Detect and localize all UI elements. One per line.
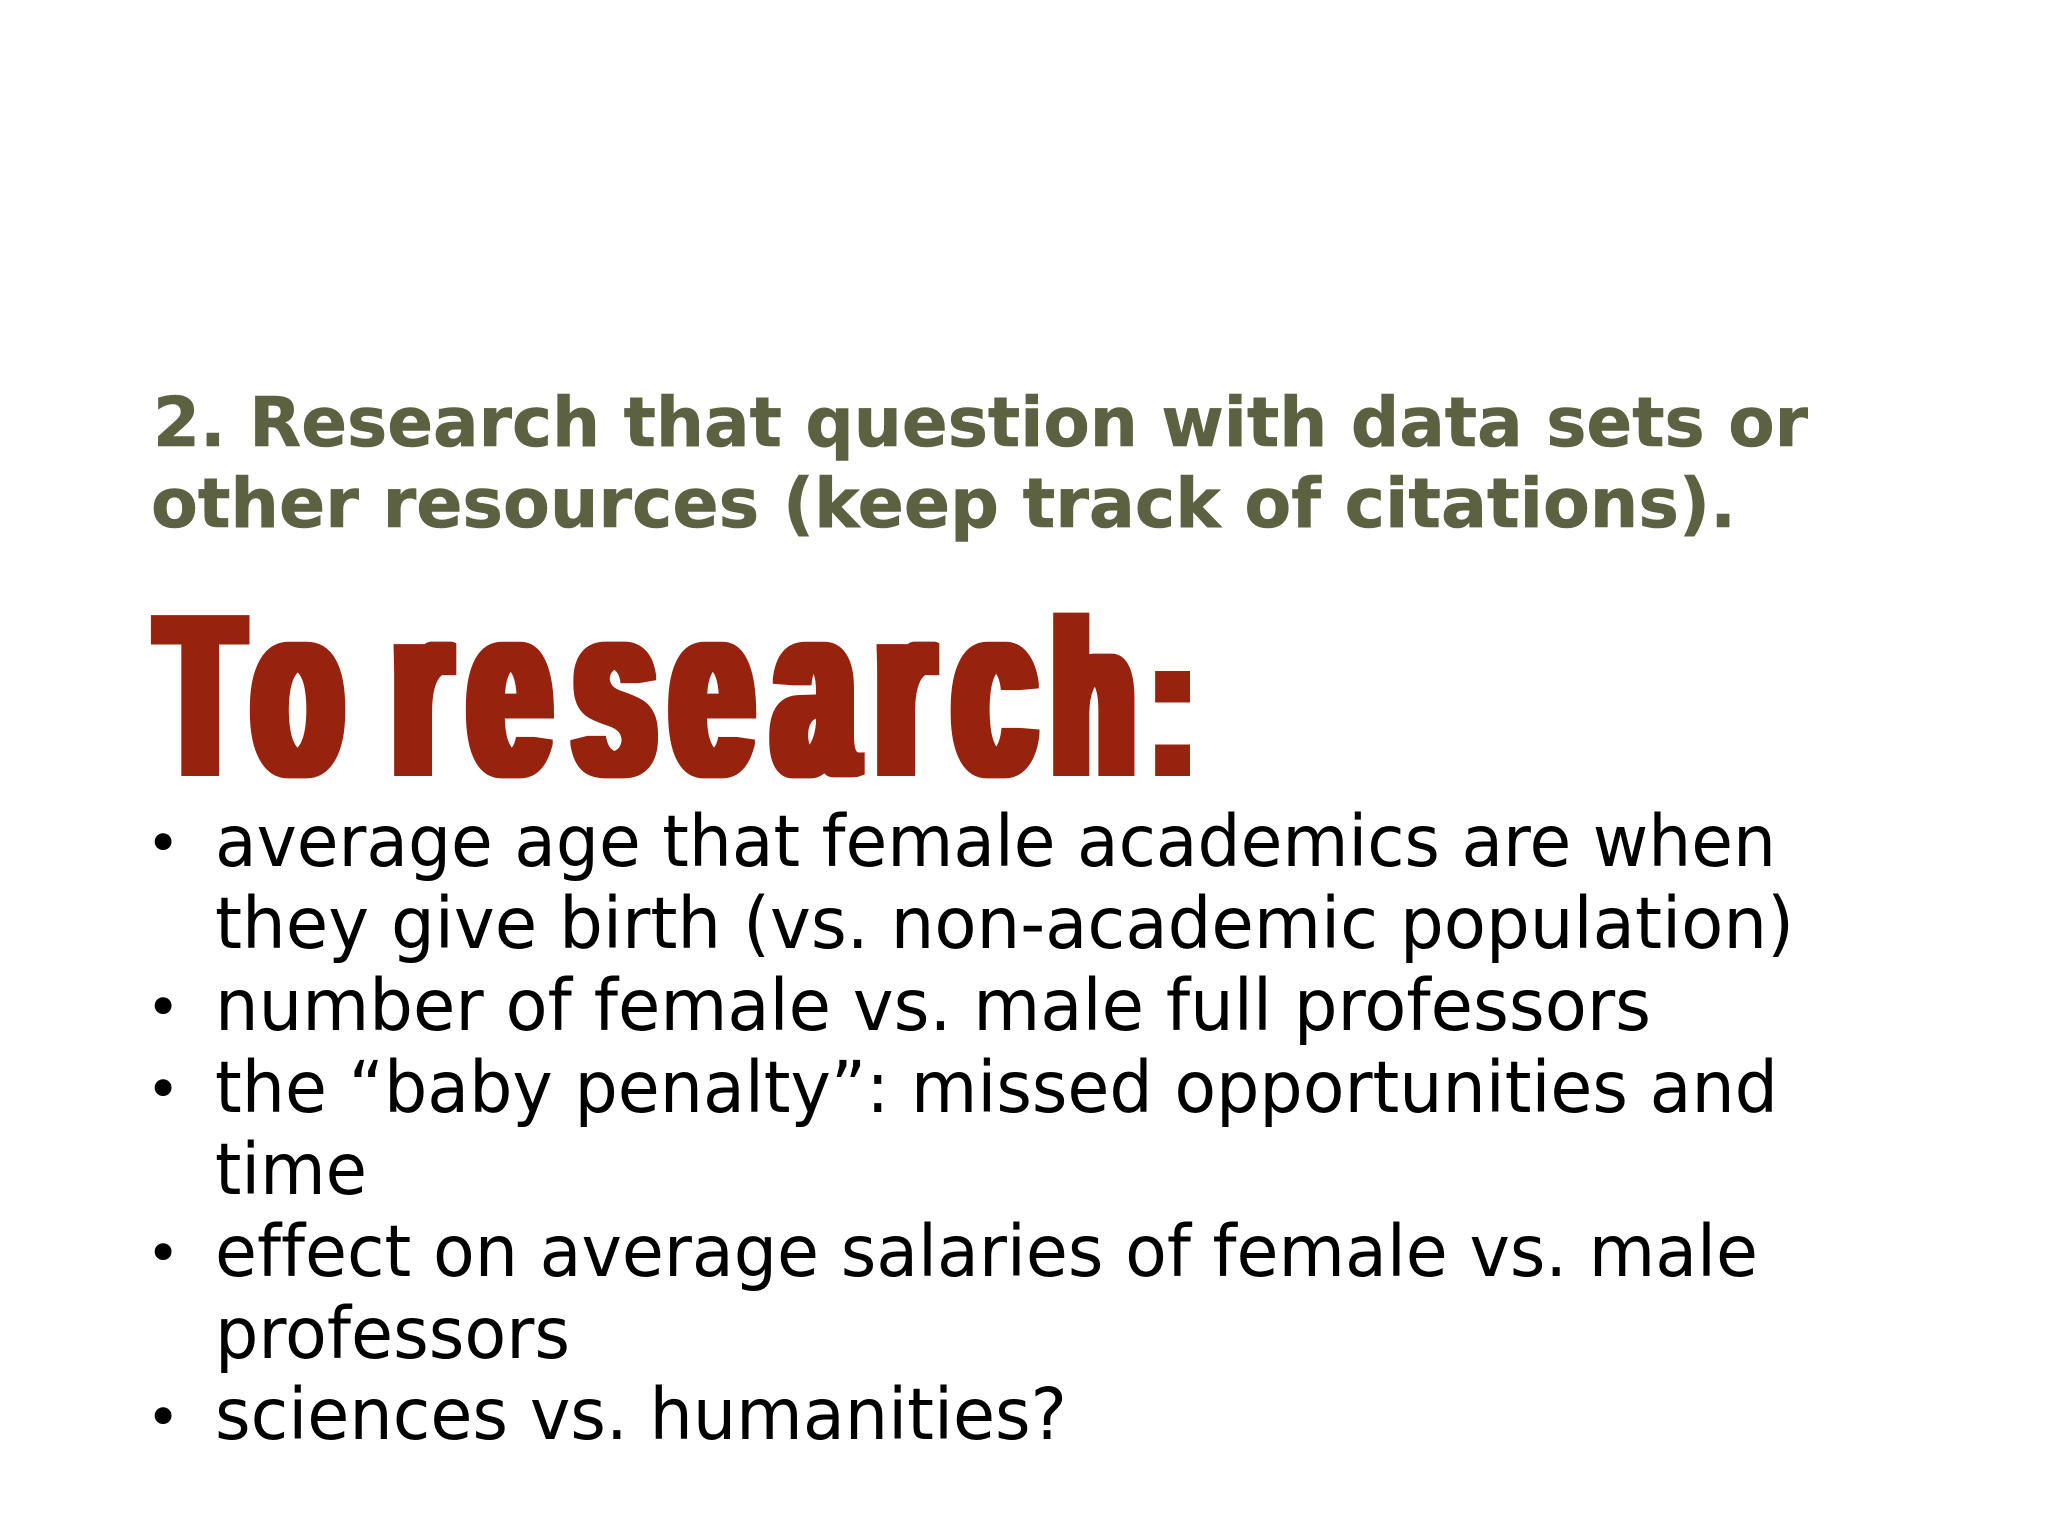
bullet 1 — [146, 800, 1794, 965]
heading: step 2 instruction: other resources (keep track of citations). — [151, 464, 1736, 544]
title: To research: o — [253, 556, 342, 826]
bullet 4 — [146, 1210, 1758, 1375]
bullet 1: average age that female academics are when — [215, 800, 1776, 883]
title: To research: researc — [393, 556, 1035, 826]
title: To research: : — [1153, 593, 1193, 816]
title: To research — [158, 556, 1193, 826]
bullet 4: effect on average salaries of female vs. male — [215, 1210, 1758, 1293]
bullet 4: • — [146, 1219, 180, 1287]
bullet 3: the “baby penalty”: missed opportunities and — [215, 1046, 1778, 1129]
bullet 2: • — [146, 973, 180, 1041]
bullet list: topics to research — [146, 800, 1794, 1456]
heading: step 2 instruction — [151, 383, 1808, 544]
heading: step 2 instruction: 2. Research that question with data sets or — [153, 383, 1808, 463]
bullet 1: they give birth (vs. non-academic population) — [215, 882, 1794, 965]
bullet 2: number of female vs. male full professors — [215, 964, 1651, 1047]
title: To research: T — [158, 568, 242, 823]
bullet 3: time — [215, 1128, 367, 1211]
bullet 5: • — [146, 1383, 180, 1451]
bullet 3 — [146, 1046, 1778, 1211]
bullet 3: • — [146, 1055, 180, 1123]
title: To research: h — [1053, 576, 1134, 821]
bullet 4: professors — [215, 1292, 570, 1375]
bullet 5: sciences vs. humanities? — [215, 1373, 1067, 1456]
bullet 1: • — [146, 809, 180, 877]
